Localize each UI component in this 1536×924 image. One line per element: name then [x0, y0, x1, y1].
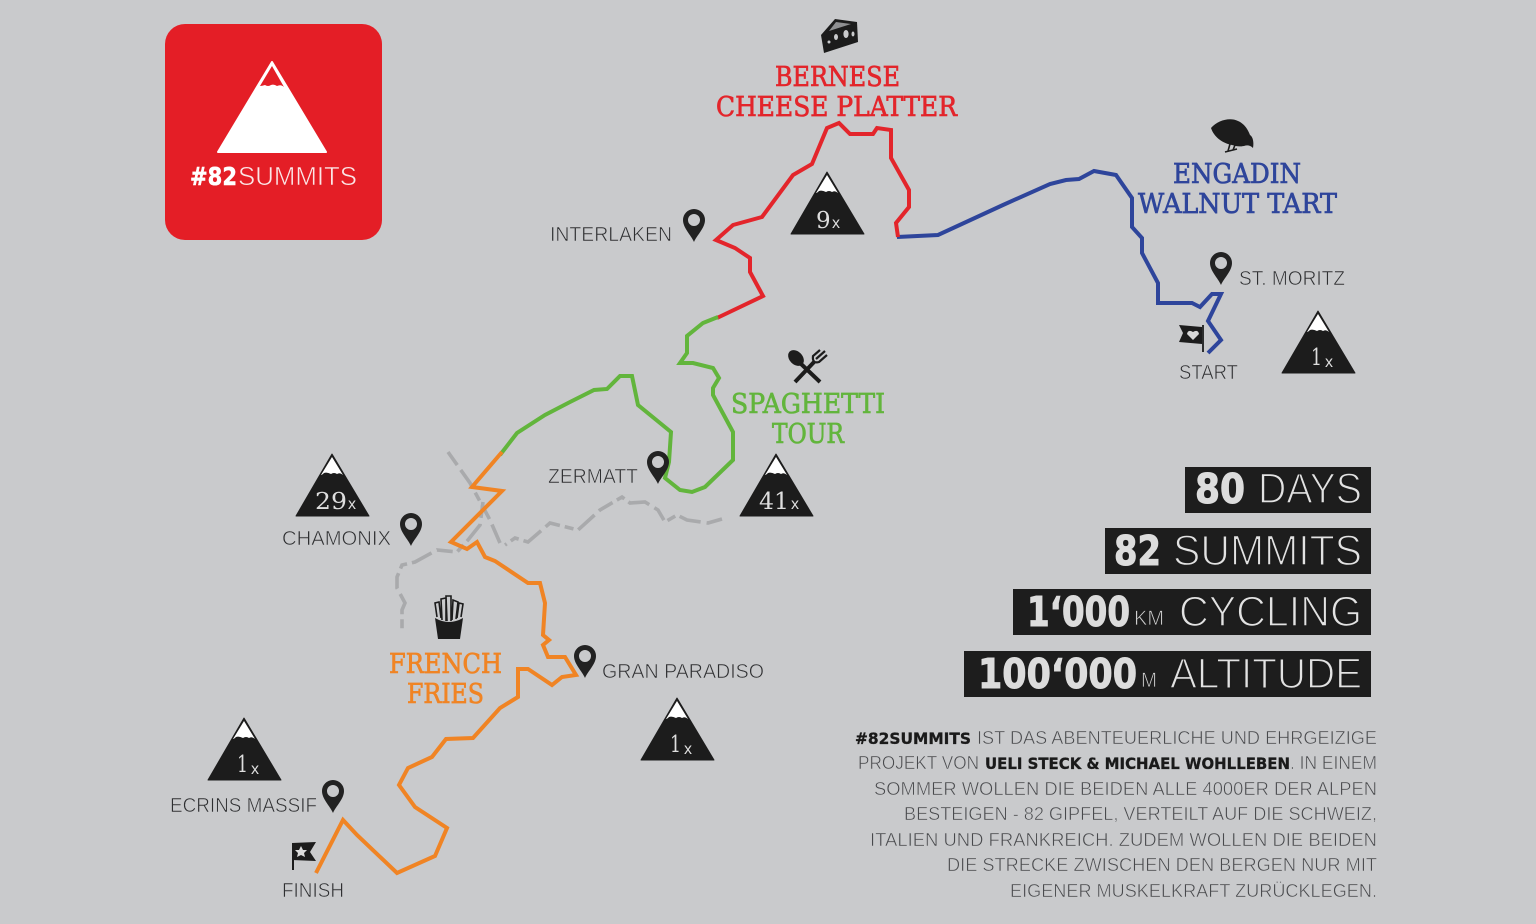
stat: 1'000 km cycling: CYCLING — [1179, 588, 1362, 636]
mountain: 9x: 9 — [816, 208, 831, 234]
route: french fries (orange) — [316, 452, 576, 873]
logo badge: SUMMITS — [238, 161, 357, 191]
description text: SOMMER WOLLEN DIE BEIDEN ALLE 4000ER DER ALPEN — [874, 779, 1377, 799]
label: st. moritz: ST. MORITZ — [1239, 268, 1345, 290]
label: zermatt: ZERMATT — [548, 466, 638, 488]
heading: french fries — [389, 649, 502, 710]
stat: 100'000 m altitude — [964, 650, 1371, 698]
stat: 82 summits: SUMMITS — [1173, 527, 1362, 575]
route: spaghetti tour (green) — [500, 317, 733, 492]
mountain: 9x — [791, 172, 864, 234]
label: interlaken: INTERLAKEN — [550, 224, 672, 246]
label: start: START — [1179, 362, 1238, 384]
icon: french fries — [435, 596, 463, 639]
heading: spaghetti tour: SPAGHETTI — [731, 389, 885, 420]
mountain: 1x gran paradiso: 1 — [670, 732, 681, 758]
pin: gran paradiso — [574, 645, 596, 678]
stat: 82 summits: 82 — [1114, 527, 1161, 575]
icon: cheese — [821, 19, 858, 53]
description text: PROJEKT VON — [858, 753, 979, 773]
stat: 100'000 m altitude: M — [1141, 669, 1157, 692]
description text: BESTEIGEN - 82 GIPFEL, VERTEILT AUF DIE SCHWEIZ, — [904, 804, 1377, 824]
route: bernese cheese platter (red) — [716, 123, 909, 318]
heading: french fries: FRIES — [407, 679, 484, 710]
description text: ITALIEN UND FRANKREICH. ZUDEM WOLLEN DIE BEIDEN — [870, 830, 1377, 850]
mountain: 1x ecrins: x — [251, 761, 259, 778]
stat: 100'000 m altitude: ALTITUDE — [1170, 650, 1362, 698]
mountain: 41x — [740, 454, 813, 516]
mountain: 1x ecrins: 1 — [237, 752, 248, 778]
heading: spaghetti tour — [731, 389, 885, 450]
icon: start flag — [1179, 325, 1203, 352]
description text: DIE STRECKE ZWISCHEN DEN BERGEN NUR MIT — [947, 855, 1377, 875]
description text: EIGENER MUSKELKRAFT ZURÜCKLEGEN. — [1010, 881, 1377, 901]
stat: 1'000 km cycling — [1013, 588, 1371, 636]
stat: 1'000 km cycling: KM — [1134, 607, 1164, 630]
description text: UELI STECK & MICHAEL WOHLLEBEN — [985, 754, 1290, 773]
heading: bernese cheese platter: CHEESE PLATTER — [716, 92, 958, 123]
mountain: 1x st moritz: 1 — [1311, 345, 1322, 371]
description text: . IN EINEM — [1290, 753, 1377, 773]
mountain: 29x — [296, 454, 369, 516]
heading: spaghetti tour: TOUR — [772, 419, 845, 450]
mountain: 29x: 29 — [315, 489, 347, 515]
icon: bird — [1211, 119, 1253, 152]
stat: 80 days: DAYS — [1258, 465, 1362, 513]
heading: french fries: FRENCH — [389, 649, 502, 680]
stat: 100'000 m altitude: 100‘000 — [978, 650, 1137, 698]
mountain: 41x: x — [791, 496, 799, 513]
mountain: 1x gran paradiso: x — [684, 741, 692, 758]
description text — [855, 728, 1377, 901]
mountain: 1x gran paradiso — [641, 698, 714, 760]
label: ecrins massif: ECRINS MASSIF — [170, 795, 317, 817]
pin: interlaken — [683, 209, 705, 242]
label: chamonix: CHAMONIX — [282, 528, 391, 550]
heading: engadin walnut tart — [1138, 159, 1337, 220]
mountain: 41x: 41 — [759, 489, 789, 515]
mountain: 1x ecrins — [208, 718, 281, 780]
borders dashed line — [397, 452, 722, 632]
description text: #82SUMMITS — [855, 729, 971, 748]
label: finish: FINISH — [282, 880, 344, 902]
label: gran paradiso: GRAN PARADISO — [602, 661, 764, 683]
logo badge: #82 — [190, 162, 237, 191]
stat: 1'000 km cycling: 1‘000 — [1027, 588, 1130, 636]
heading: engadin walnut tart: ENGADIN — [1173, 159, 1301, 190]
mountain: 1x st moritz — [1282, 311, 1355, 373]
mountain: 1x st moritz: x — [1325, 354, 1333, 371]
stat: 80 days: 80 — [1195, 465, 1245, 513]
mountain: 29x: x — [348, 496, 356, 513]
route: engadin walnut tart (blue) — [897, 171, 1221, 353]
heading: bernese cheese platter: BERNESE — [775, 62, 900, 93]
pin: chamonix — [400, 513, 422, 546]
pin: st. moritz — [1210, 252, 1232, 285]
icon: finish flag — [292, 842, 316, 870]
heading: engadin walnut tart: WALNUT TART — [1138, 189, 1337, 220]
logo badge — [165, 24, 382, 240]
icon: spoon and fork — [785, 347, 827, 382]
heading: bernese cheese platter — [716, 62, 958, 123]
pin: ecrins massif — [322, 780, 344, 813]
pin: zermatt — [647, 451, 669, 484]
stat: 80 days — [1185, 465, 1371, 513]
description text: IST DAS ABENTEUERLICHE UND EHRGEIZIGE — [977, 728, 1377, 748]
mountain: 9x: x — [832, 215, 840, 232]
